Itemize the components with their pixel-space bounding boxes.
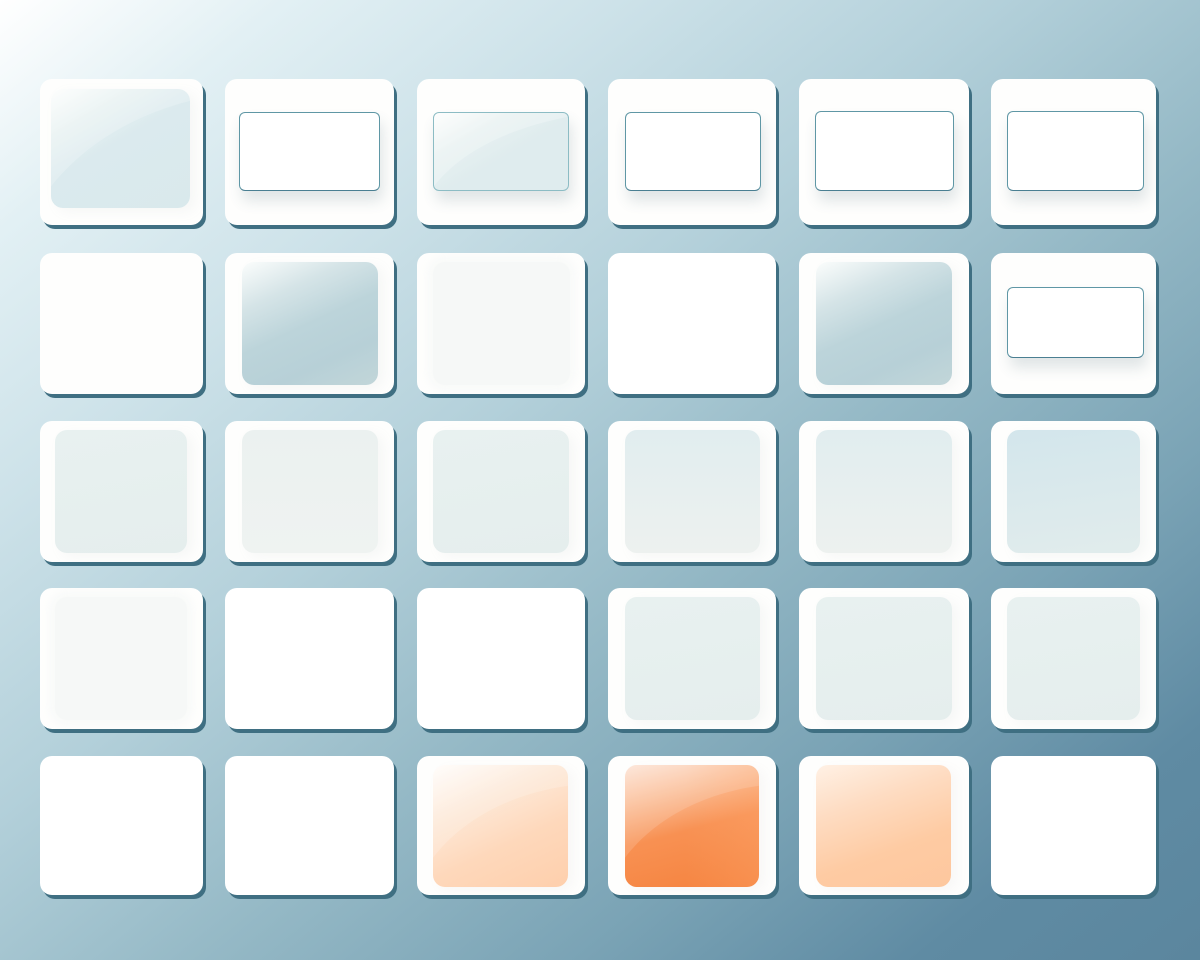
tile r2c6 bbox=[991, 253, 1156, 394]
deep orange glossy panel bbox=[625, 765, 759, 887]
white bordered box bbox=[239, 112, 380, 191]
tile r2c3 bbox=[417, 253, 585, 394]
tile r4c4 bbox=[608, 588, 776, 729]
tile r4c6 bbox=[991, 588, 1156, 729]
tile r1c1 bbox=[40, 79, 203, 225]
tile r5c4 bbox=[608, 756, 776, 895]
tile r5c1 bbox=[40, 756, 203, 895]
tile r5c2 bbox=[225, 756, 394, 895]
tile r2c2 bbox=[225, 253, 394, 394]
tile r5c5 bbox=[799, 756, 969, 895]
glossy pale blue panel bbox=[51, 89, 190, 208]
tile r3c3 bbox=[417, 421, 585, 562]
tile r1c5 bbox=[799, 79, 969, 225]
pale green-grey panel bbox=[433, 430, 569, 553]
tile r5c3 bbox=[417, 756, 585, 895]
white bordered box bbox=[625, 112, 761, 191]
tile r1c4 bbox=[608, 79, 776, 225]
tile r3c2 bbox=[225, 421, 394, 562]
tile r5c6 bbox=[991, 756, 1156, 895]
white bordered box bbox=[815, 111, 954, 191]
tile r3c1 bbox=[40, 421, 203, 562]
pale green-grey panel bbox=[816, 597, 952, 720]
steel blue panel bbox=[816, 262, 952, 385]
faint panel bbox=[433, 262, 570, 385]
tile r3c5 bbox=[799, 421, 969, 562]
pale green-grey panel bbox=[625, 597, 760, 720]
tile r2c1 bbox=[40, 253, 203, 394]
tile r3c6 bbox=[991, 421, 1156, 562]
tile r1c2 bbox=[225, 79, 394, 225]
pale green-grey panel bbox=[625, 430, 760, 553]
tile r4c3 bbox=[417, 588, 585, 729]
glossy bordered box bbox=[433, 112, 569, 191]
steel blue panel bbox=[242, 262, 378, 385]
pale blue panel bbox=[1007, 430, 1140, 553]
white bordered box bbox=[1007, 111, 1144, 191]
white bordered box bbox=[1007, 287, 1144, 358]
pale orange glossy panel bbox=[433, 765, 568, 887]
tile r1c6 bbox=[991, 79, 1156, 225]
tile r4c5 bbox=[799, 588, 969, 729]
tile r4c2 bbox=[225, 588, 394, 729]
pale grey panel bbox=[242, 430, 378, 553]
pale green-grey panel bbox=[55, 430, 187, 553]
tile r1c3 bbox=[417, 79, 585, 225]
pale grey panel bbox=[816, 430, 952, 553]
mid orange panel bbox=[816, 765, 951, 887]
faint panel bbox=[55, 597, 187, 720]
tile r2c5 bbox=[799, 253, 969, 394]
tile r2c4 bbox=[608, 253, 776, 394]
tile r4c1 bbox=[40, 588, 203, 729]
pale green-grey panel bbox=[1007, 597, 1140, 720]
tile r3c4 bbox=[608, 421, 776, 562]
